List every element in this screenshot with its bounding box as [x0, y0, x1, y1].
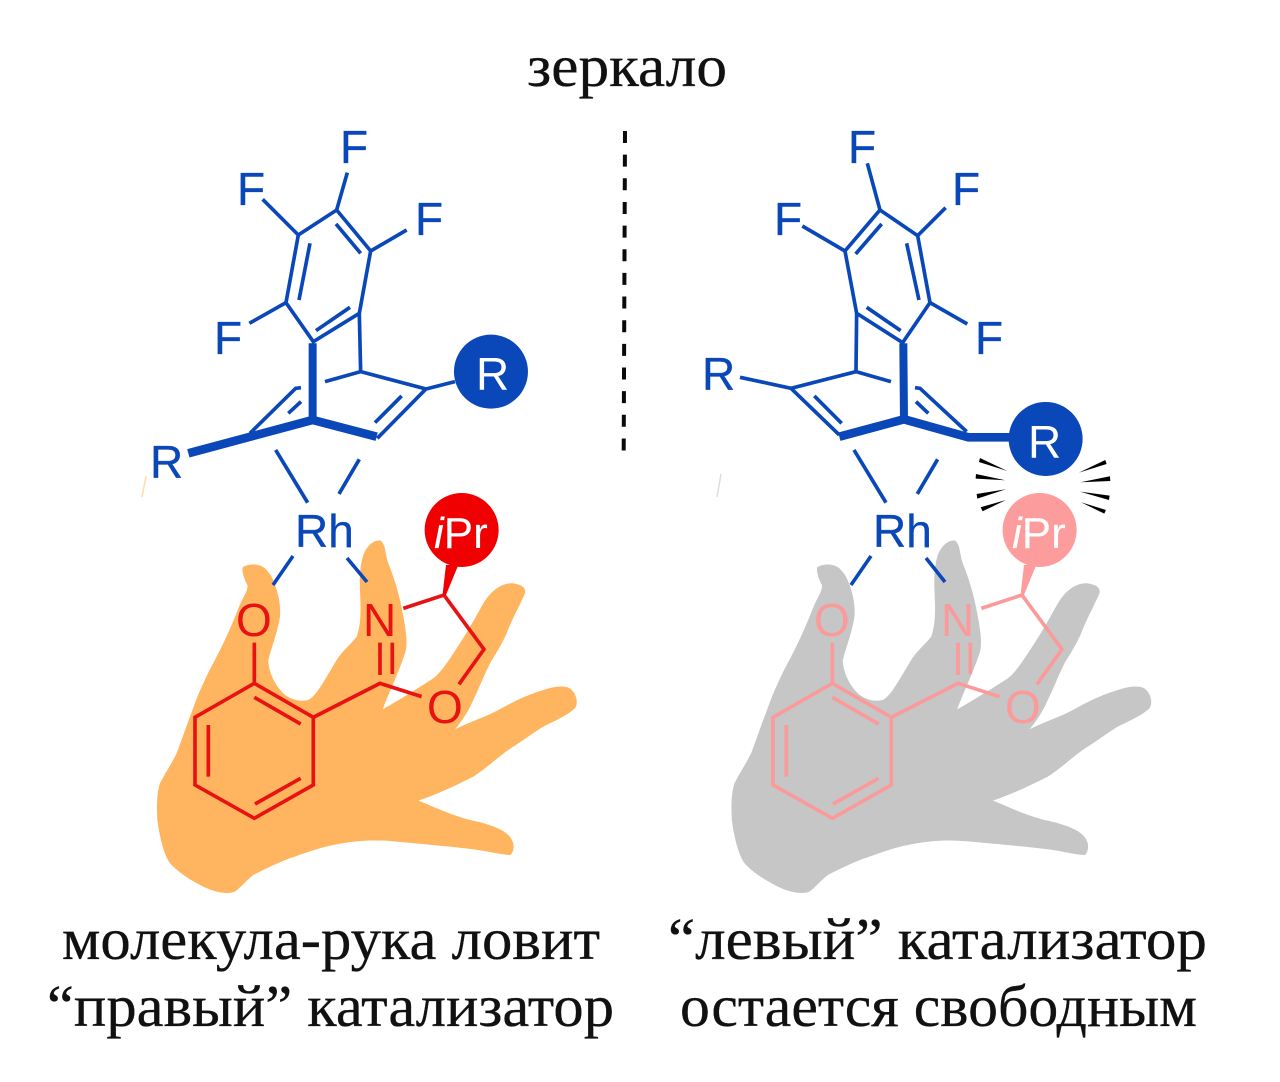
- right F and R labels: F: [774, 193, 802, 245]
- right F and R labels: F: [848, 121, 876, 173]
- right blue barrelene ligand: [740, 163, 1083, 503]
- right pink atom labels: [814, 509, 1066, 733]
- left iPr circle: [425, 493, 499, 567]
- left F and R labels: R: [476, 348, 509, 400]
- left blue barrelene ligand: [188, 173, 528, 503]
- right pink atom labels: O: [1005, 681, 1041, 733]
- left F and R labels: Rh: [295, 505, 354, 557]
- right blue R circle: [1009, 402, 1083, 476]
- right F and R labels: F: [975, 312, 1003, 364]
- dashed mirror line: [624, 131, 625, 451]
- left wedge bond: [443, 565, 458, 595]
- right F and R labels: R: [1028, 416, 1061, 468]
- right grey hand: [731, 540, 1151, 893]
- panel: left hand with catalyst: [47, 121, 614, 1039]
- strain marks: [976, 458, 1110, 514]
- left F and R labels: F: [237, 163, 265, 215]
- left F and R labels: F: [214, 312, 242, 364]
- right F and R labels: R: [702, 348, 735, 400]
- left red atom labels: O: [236, 594, 272, 646]
- left red atom labels: O: [427, 681, 463, 733]
- left caption: “правый” катализатор: [47, 973, 614, 1039]
- right caption: остается свободным: [680, 973, 1197, 1039]
- left red atom labels: iPr: [434, 509, 488, 558]
- left blue R circle: [454, 335, 528, 409]
- right wedge bond: [1021, 565, 1036, 595]
- right pink atom labels: N: [941, 594, 974, 646]
- left caption: молекула-рука ловит: [62, 906, 600, 972]
- left red atom labels: [236, 509, 488, 733]
- left red atom labels: N: [363, 594, 396, 646]
- left red ligand: [195, 493, 499, 818]
- right F and R labels: Rh: [873, 505, 932, 557]
- right F and R labels: F: [952, 163, 980, 215]
- title: зеркало: [527, 33, 727, 99]
- right iPr circle: [1003, 493, 1077, 567]
- right hand sliver: [717, 474, 721, 497]
- right caption: [668, 906, 1207, 1039]
- left F and R labels: F: [415, 193, 443, 245]
- right pink atom labels: iPr: [1012, 509, 1066, 558]
- left F and R labels: R: [150, 436, 183, 488]
- left F and R labels: F: [340, 121, 368, 173]
- right F and R labels: [702, 121, 1061, 557]
- right pink ligand: [773, 493, 1077, 818]
- left F and R labels: [150, 121, 509, 557]
- left caption: [47, 906, 614, 1039]
- right pink atom labels: O: [814, 594, 850, 646]
- left Rh bonds: [273, 556, 367, 585]
- right Rh bonds: [851, 556, 945, 585]
- left orange hand: [157, 540, 577, 893]
- panel: right hand with catalyst: [668, 121, 1207, 1039]
- left hand sliver: [142, 476, 146, 497]
- right caption: “левый” катализатор: [668, 906, 1207, 972]
